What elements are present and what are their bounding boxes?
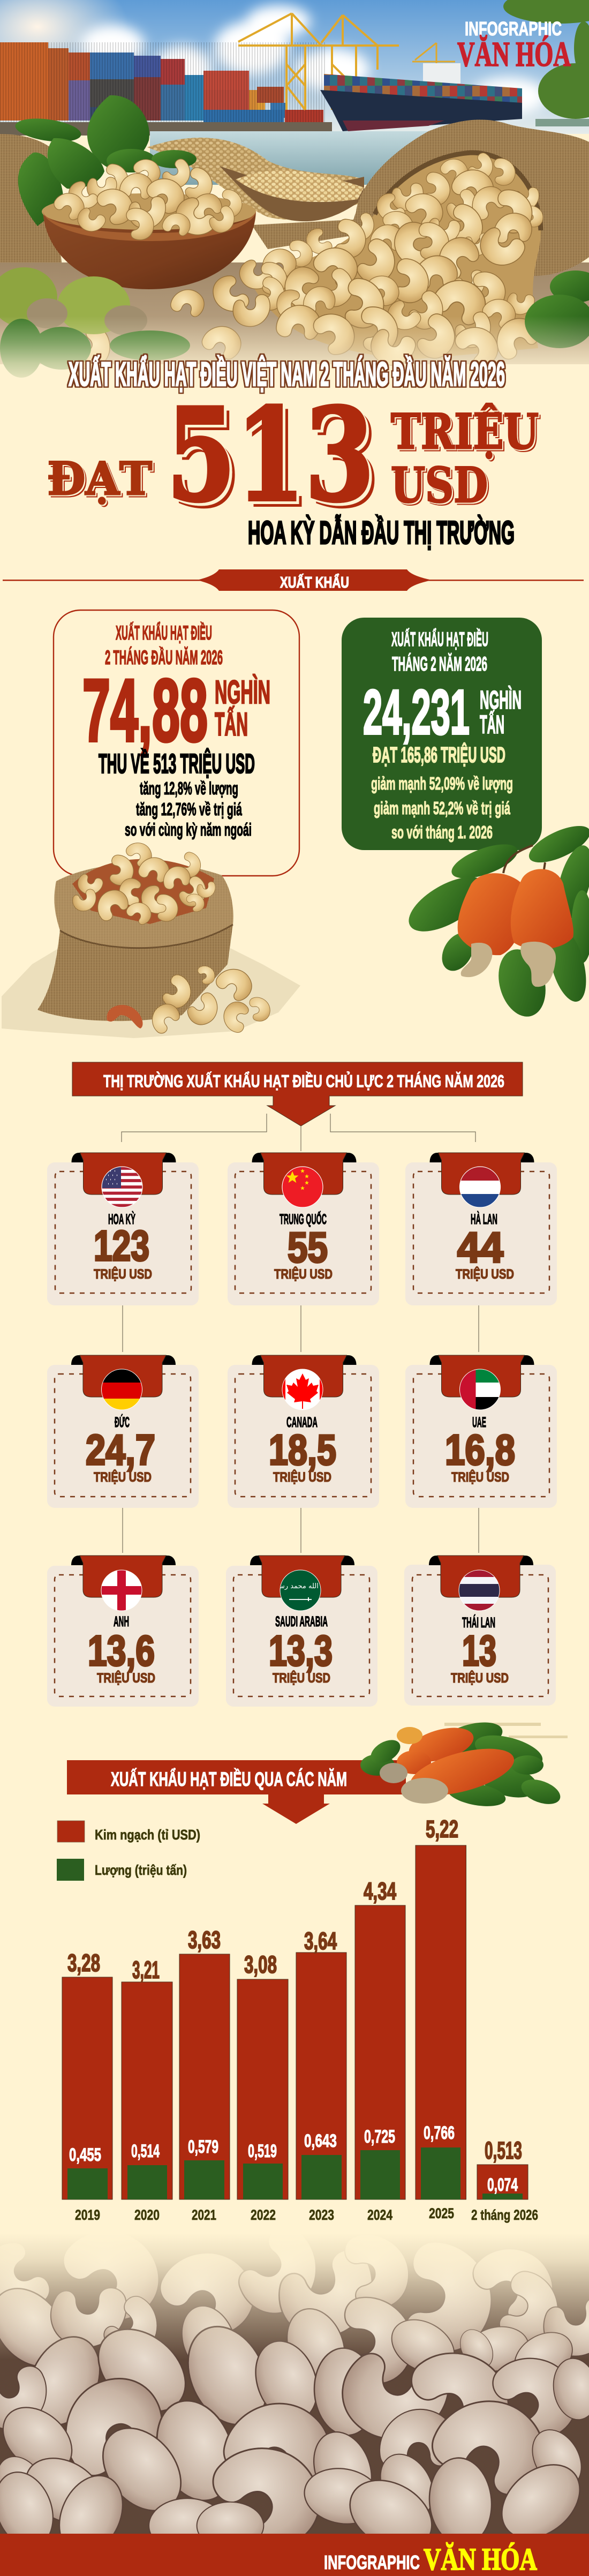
- flag: Germany: [102, 1369, 142, 1410]
- panel: two months export: XUẤT KHẨU HẠT ĐIỀU: [116, 621, 212, 644]
- bar 2025: 5,22: [426, 1815, 458, 1843]
- card: Trung Quốc: TRUNG QUỐC: [280, 1210, 327, 1227]
- hero illustration: cashew export port scene: [0, 0, 589, 390]
- growth details: tăng 12,76% về trị giá: [136, 799, 242, 819]
- cranes: [238, 13, 455, 110]
- bar 2021: [179, 1926, 230, 2223]
- bar 2021: 3,63: [188, 1926, 221, 1954]
- bar 2019: 2019: [75, 2207, 100, 2223]
- leaves behind bowl: [14, 95, 197, 226]
- footer band: [0, 2534, 589, 2576]
- unit: nghìn tấn: [480, 686, 522, 739]
- bar 2020: 2020: [134, 2207, 160, 2223]
- bar 2 months 2026: [471, 2137, 538, 2223]
- headline unit: [391, 403, 539, 514]
- flag: England: [101, 1570, 142, 1611]
- card: Hoa Kỳ: HOA KỲ: [108, 1211, 135, 1227]
- logo: infographic văn hóa: [457, 18, 571, 74]
- footer band: VĂN HÓA: [424, 2542, 537, 2576]
- unit: nghìn tấn: TẤN: [480, 710, 504, 739]
- decline details: [371, 773, 513, 842]
- panel heading: [391, 628, 488, 675]
- bar 2023: 0,643: [304, 2131, 337, 2151]
- loose cashews: [107, 962, 272, 1036]
- unit: nghìn tấn: TẤN: [215, 706, 248, 742]
- value: 13,3: [269, 1627, 333, 1674]
- bar chart: export value and volume: [62, 1815, 538, 2223]
- section divider: xuất khẩu: [3, 569, 584, 591]
- bar 2020: 3,21: [132, 1956, 160, 1984]
- bar 2019: [62, 1949, 112, 2223]
- bar 2023: [296, 1927, 346, 2223]
- burlap cloth left: [0, 134, 62, 262]
- flag: UAE: [459, 1369, 500, 1410]
- value: 13: [462, 1627, 496, 1674]
- container ship: [320, 63, 522, 131]
- value: 13,6: [88, 1627, 155, 1674]
- revenue: THU VỀ 513 TRIỆU USD: [99, 748, 255, 779]
- bar 2023: 3,64: [304, 1927, 337, 1955]
- wooden bowl with cashews: [42, 155, 256, 289]
- card: Anh: [47, 1556, 199, 1707]
- card: Thái Lan: [404, 1556, 556, 1706]
- back sack with cashew pile: [147, 138, 364, 220]
- chart section header with arrow: [67, 1760, 406, 1824]
- market section header with arrow: [72, 1062, 523, 1126]
- chart section header with arrow: XUẤT KHẨU HẠT ĐIỀU QUA CÁC NĂM: [111, 1768, 347, 1790]
- unit: nghìn tấn: NGHÌN: [480, 686, 522, 715]
- big number: 24,231: 24,231: [363, 677, 470, 748]
- flag: USA: [102, 1167, 142, 1207]
- unit: TRIỆU USD: [94, 1266, 152, 1282]
- bar 2019: 3,28: [67, 1949, 100, 1977]
- wood table: [0, 262, 589, 364]
- card: Trung Quốc: [228, 1153, 379, 1305]
- illustration: burlap sack of cashews: [2, 839, 300, 1038]
- panel heading: 2 THÁNG ĐẦU NĂM 2026: [105, 647, 223, 669]
- footer band: INFOGRAPHIC: [324, 2551, 420, 2573]
- card: Canada: [228, 1355, 379, 1508]
- leaves bottom right: [525, 271, 589, 348]
- title: [47, 355, 539, 551]
- headline word: đạt: ĐẠT: [47, 452, 152, 505]
- bar 2024: [355, 1877, 405, 2223]
- growth details: [125, 778, 252, 839]
- panel heading: THÁNG 2 NĂM 2026: [392, 653, 487, 675]
- card: Đức: [47, 1355, 199, 1508]
- value: 24,7: [86, 1426, 155, 1474]
- card: Đức: ĐỨC: [115, 1414, 130, 1430]
- unit: TRIỆU USD: [94, 1469, 152, 1485]
- panel: february export: [342, 618, 542, 850]
- main cashew pile: [63, 151, 545, 376]
- tree: [503, 0, 589, 119]
- bar 2024: 2024: [367, 2207, 392, 2223]
- bar 2019: 0,455: [69, 2145, 101, 2165]
- card: Hà Lan: HÀ LAN: [471, 1211, 497, 1227]
- bottom photo: raw cashew nuts: [0, 2243, 589, 2534]
- bar 2023: 2023: [309, 2207, 334, 2223]
- card: Canada: CANADA: [286, 1414, 318, 1430]
- card: Hà Lan: [405, 1153, 557, 1305]
- unit: nghìn tấn: [215, 674, 270, 742]
- cashew apples foreground: [0, 267, 190, 378]
- water: [150, 131, 482, 185]
- value: 55: [288, 1223, 328, 1271]
- decline details: so với tháng 1. 2026: [391, 822, 493, 842]
- section divider: xuất khẩu: XUẤT KHẨU: [280, 573, 349, 591]
- card: UAE: UAE: [472, 1414, 486, 1430]
- flag: Thailand: [459, 1570, 500, 1611]
- card: Anh: ANH: [114, 1613, 129, 1629]
- unit: TRIỆU USD: [451, 1670, 509, 1686]
- bar 2025: [416, 1815, 466, 2221]
- chart legend: Lượng (triệu tấn): [95, 1862, 187, 1878]
- unit: TRIỆU USD: [273, 1469, 331, 1485]
- illustration: cashew fruits and leaves: [360, 1716, 568, 1810]
- chart legend: Kim ngạch (tỉ USD): [95, 1827, 200, 1843]
- bar 2024: 4,34: [364, 1877, 396, 1905]
- growth details: so với cùng kỳ năm ngoái: [125, 820, 252, 839]
- bar 2020: 0,514: [131, 2141, 160, 2161]
- value: 123: [94, 1222, 149, 1270]
- bar 2022: 0,519: [248, 2141, 277, 2161]
- headline unit: TRIỆU: [391, 403, 539, 460]
- card: Hoa Kỳ: [47, 1153, 199, 1305]
- bar 2025: 2025: [429, 2205, 454, 2221]
- bar 2021: 2021: [192, 2207, 216, 2223]
- bar 2024: 0,725: [364, 2127, 395, 2147]
- headline number: 513: 513: [167, 381, 374, 530]
- bar 2022: [237, 1951, 288, 2223]
- unit: TRIỆU USD: [456, 1266, 514, 1282]
- value: 16,8: [445, 1426, 515, 1474]
- bar 2 months 2026: 0,513: [485, 2137, 522, 2164]
- unit: TRIỆU USD: [97, 1670, 155, 1686]
- bar 2 months 2026: 0,074: [487, 2175, 518, 2195]
- panel heading: [105, 621, 223, 669]
- growth details: tăng 12,8% về lượng: [140, 778, 238, 798]
- headline unit: USD: [391, 457, 488, 514]
- flag: Canada: [282, 1369, 323, 1410]
- chart legend: [57, 1821, 200, 1881]
- bar 2022: 2022: [251, 2207, 276, 2223]
- card: UAE: [405, 1355, 557, 1508]
- unit: TRIỆU USD: [451, 1469, 509, 1485]
- bar 2022: 3,08: [244, 1951, 277, 1978]
- dock: [0, 122, 332, 136]
- flag: Saudi Arabia: [280, 1569, 321, 1611]
- hero fade: [0, 316, 589, 390]
- card: Thái Lan: THÁI LAN: [462, 1614, 495, 1631]
- big number: 74,88: 74,88: [82, 661, 208, 760]
- flag: China: [282, 1167, 323, 1207]
- bar 2021: 0,579: [188, 2137, 218, 2157]
- flag: Netherlands: [459, 1167, 500, 1207]
- value: 44: [457, 1223, 503, 1271]
- bar 2 months 2026: 2 tháng 2026: [471, 2207, 538, 2223]
- panel: two months export: [54, 610, 299, 876]
- connectors: [122, 1114, 479, 1553]
- unit: TRIỆU USD: [273, 1670, 330, 1686]
- container stacks: [0, 42, 327, 123]
- unit: nghìn tấn: NGHÌN: [215, 674, 270, 710]
- country name: SAUDI ARABIA: [275, 1613, 328, 1629]
- flag: Saudi Arabia: لا إله إلا الله محمد رسول الله: [258, 1582, 343, 1590]
- bar 2020: [122, 1956, 172, 2223]
- value: 18,5: [269, 1426, 336, 1474]
- card: Saudi Arabia: [226, 1556, 377, 1707]
- big burlap sack: [252, 119, 589, 276]
- unit: TRIỆU USD: [274, 1266, 333, 1282]
- illustration: cashew apples and leaves: [401, 818, 589, 1022]
- bar 2025: 0,766: [424, 2123, 455, 2143]
